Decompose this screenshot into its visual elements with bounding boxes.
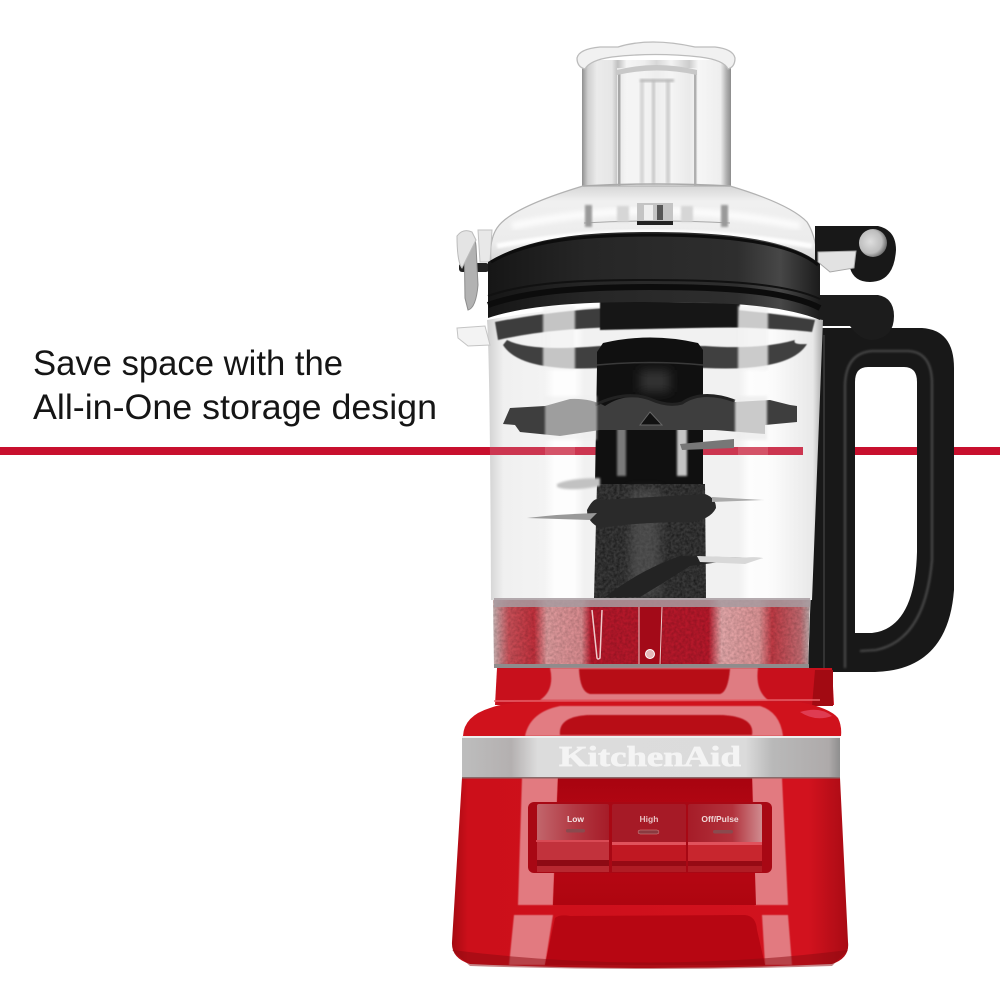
handle upper tab: [820, 295, 894, 340]
top blade disc: [503, 396, 797, 436]
control buttons: [528, 802, 772, 873]
base shoulder: [463, 702, 841, 736]
feed tube rim: [577, 42, 735, 69]
button: Low: [536, 804, 609, 872]
transparent bowl: [457, 300, 823, 600]
red line through bowl: [490, 447, 803, 455]
button: High: High: [640, 814, 658, 824]
right highlight: [752, 778, 788, 905]
headline text: Save space with the: [33, 344, 343, 383]
black lid ring: [488, 232, 820, 320]
inner pale ellipse and lower crescent: [503, 340, 807, 369]
central shaft: [594, 338, 706, 598]
brushed metal band: [462, 736, 840, 778]
headline text: All-in-One storage design: [33, 388, 437, 427]
headline text: [33, 344, 437, 427]
red horizontal rule: [0, 447, 1000, 455]
upper dark rim interior: [495, 306, 815, 340]
KitchenAid logo: KitchenAid: [559, 741, 741, 773]
red bowl base: [493, 598, 810, 668]
food processor: [452, 42, 954, 969]
bowl spout: [457, 326, 490, 346]
feed tube: [577, 42, 735, 188]
spiral flange and lower blades: [527, 439, 764, 597]
lid dome: [491, 184, 818, 262]
button: High: [612, 804, 686, 872]
button: Low: Low: [567, 814, 584, 824]
button: Off/Pulse: [688, 804, 762, 872]
handle: [808, 295, 954, 672]
red collar: [494, 668, 834, 706]
lower red body: [452, 778, 848, 969]
bowl vertical highlights: [543, 306, 768, 440]
centre shade: [553, 778, 756, 905]
button: Off/Pulse: Off/Pulse: [701, 814, 739, 824]
right hinge with chrome knob: [815, 226, 896, 282]
left highlight: [518, 778, 558, 905]
left chrome latch: [457, 230, 492, 310]
